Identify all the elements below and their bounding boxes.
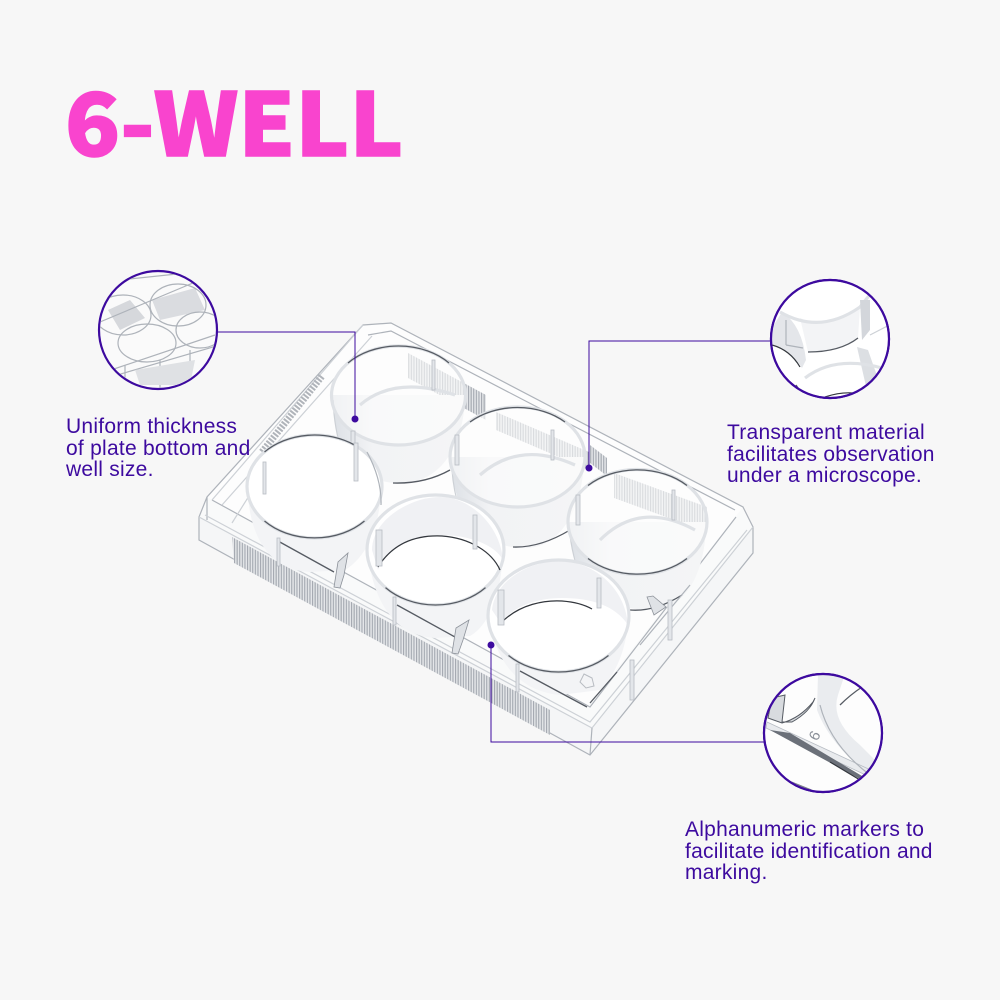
text: transparent material: facilitates observation <box>727 443 935 466</box>
printed label strip <box>262 376 322 452</box>
plate lid and skirt <box>199 323 753 755</box>
text: transparent material: under a microscope. <box>727 464 922 487</box>
plate corner mark <box>580 674 594 688</box>
well: back middle <box>450 407 585 548</box>
text: alphanumeric markers: marking. <box>685 861 768 884</box>
marker digit: 6 <box>806 728 825 744</box>
well: back right <box>568 470 707 610</box>
text: uniform thickness <box>66 415 251 481</box>
callout line: uniform thickness <box>217 332 358 422</box>
well: front left <box>247 435 382 572</box>
text: alphanumeric markers: Alphanumeric markers to <box>685 818 924 841</box>
text: alphanumeric markers <box>685 818 933 884</box>
well: front right <box>488 560 629 695</box>
title: 6-WELL <box>65 56 403 182</box>
well: front middle <box>367 495 504 638</box>
text: uniform thickness: of plate bottom and <box>66 437 251 460</box>
callout line: transparent material <box>586 341 771 472</box>
text: uniform thickness: Uniform thickness <box>66 415 237 438</box>
magnifier: well close-up <box>770 280 895 400</box>
side combs <box>232 353 707 735</box>
callout line: alphanumeric markers <box>488 642 764 742</box>
text: alphanumeric markers: facilitate identification and <box>685 840 933 863</box>
text: transparent material: Transparent material <box>727 421 925 444</box>
well dividers and front edge <box>277 538 690 707</box>
well: back left <box>332 346 466 483</box>
text: transparent material <box>727 421 935 487</box>
text: uniform thickness: well size. <box>66 458 154 481</box>
magnifier: alphanumeric marker <box>764 674 884 794</box>
well plate <box>199 323 753 755</box>
magnifier: plate overview <box>95 270 224 390</box>
